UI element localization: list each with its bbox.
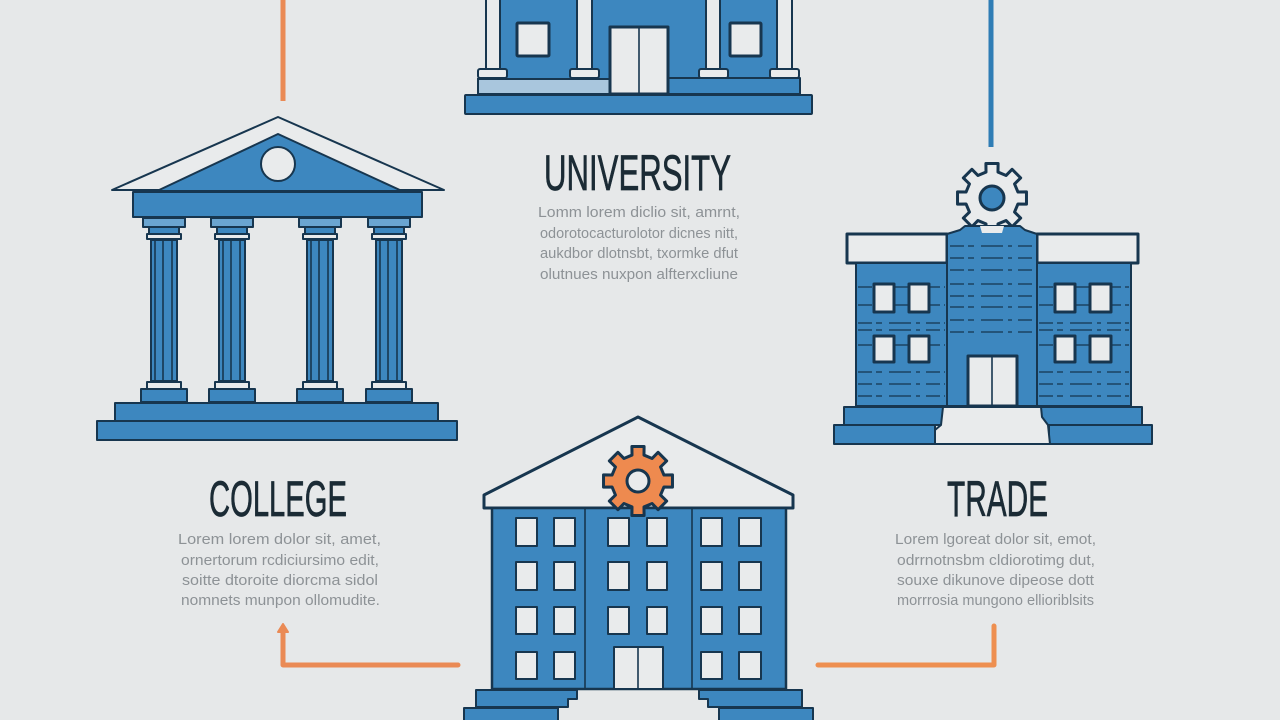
trade door — [968, 356, 1017, 406]
text block: college description: soitte dtoroite diorcma sidol — [182, 573, 378, 589]
campus roof — [484, 417, 793, 508]
trade steps — [834, 407, 1152, 444]
campus body — [492, 508, 786, 689]
trade center block — [947, 226, 1037, 406]
temple roof — [112, 117, 444, 191]
trade wings — [856, 263, 1131, 406]
arrow: campus to college — [278, 624, 458, 665]
icon: central campus building — [464, 417, 813, 720]
temple column 3 — [297, 218, 343, 402]
text block: trade description: morrrosia mungono ellioriblsits — [897, 593, 1094, 609]
text block: university description: Lomm lorem diclio sit, amrnt, — [538, 205, 740, 221]
text block: trade description — [895, 532, 1096, 609]
temple column 2 — [209, 218, 255, 402]
text block: college description: nomnets munpon ollomudite. — [181, 593, 380, 609]
temple entablature — [133, 192, 422, 217]
arrow: orange connector from top to college — [280, 0, 286, 101]
text block: university description — [538, 205, 740, 283]
icon: college temple — [97, 117, 457, 440]
text block: college description: ornertorum rcdiciursimo edit, — [181, 553, 379, 569]
arrow: campus to trade — [818, 626, 994, 665]
campus steps — [464, 690, 813, 720]
trade wing roofs — [847, 234, 1138, 263]
text block: college description — [178, 532, 381, 609]
heading: university: UNIVERSITY — [544, 145, 731, 201]
trade gear base overlap — [980, 226, 1004, 233]
icon: trade school building — [834, 164, 1152, 444]
text block: trade description: odrrnotnsbm cldiorotimg dut, — [897, 553, 1095, 569]
text block: university description: olutnues nuxpon alfterxcliune — [540, 267, 738, 283]
arrow: blue connector from top to trade — [988, 0, 994, 147]
icon: university building — [465, 0, 812, 114]
heading: trade: TRADE — [947, 471, 1048, 527]
temple steps — [97, 403, 457, 440]
campus door — [614, 647, 663, 689]
temple column 1 — [141, 218, 187, 402]
text block: university description: aukdbor dlotnsbt, txormke dfut — [540, 246, 738, 262]
temple column 4 — [366, 218, 412, 402]
campus gear — [604, 447, 672, 515]
trade gear — [958, 164, 1026, 232]
text block: university description: odorotocacturolotor dicnes nitt, — [540, 226, 738, 242]
text block: college description: Lorem lorem dolor sit, amet, — [178, 532, 381, 548]
text block: trade description: souxe dikunove dipeose dott — [897, 573, 1094, 589]
text block: trade description: Lorem lgoreat dolor sit, emot, — [895, 532, 1096, 548]
heading: college: COLLEGE — [209, 471, 347, 527]
trade windows — [874, 284, 1111, 362]
campus windows — [516, 518, 761, 679]
